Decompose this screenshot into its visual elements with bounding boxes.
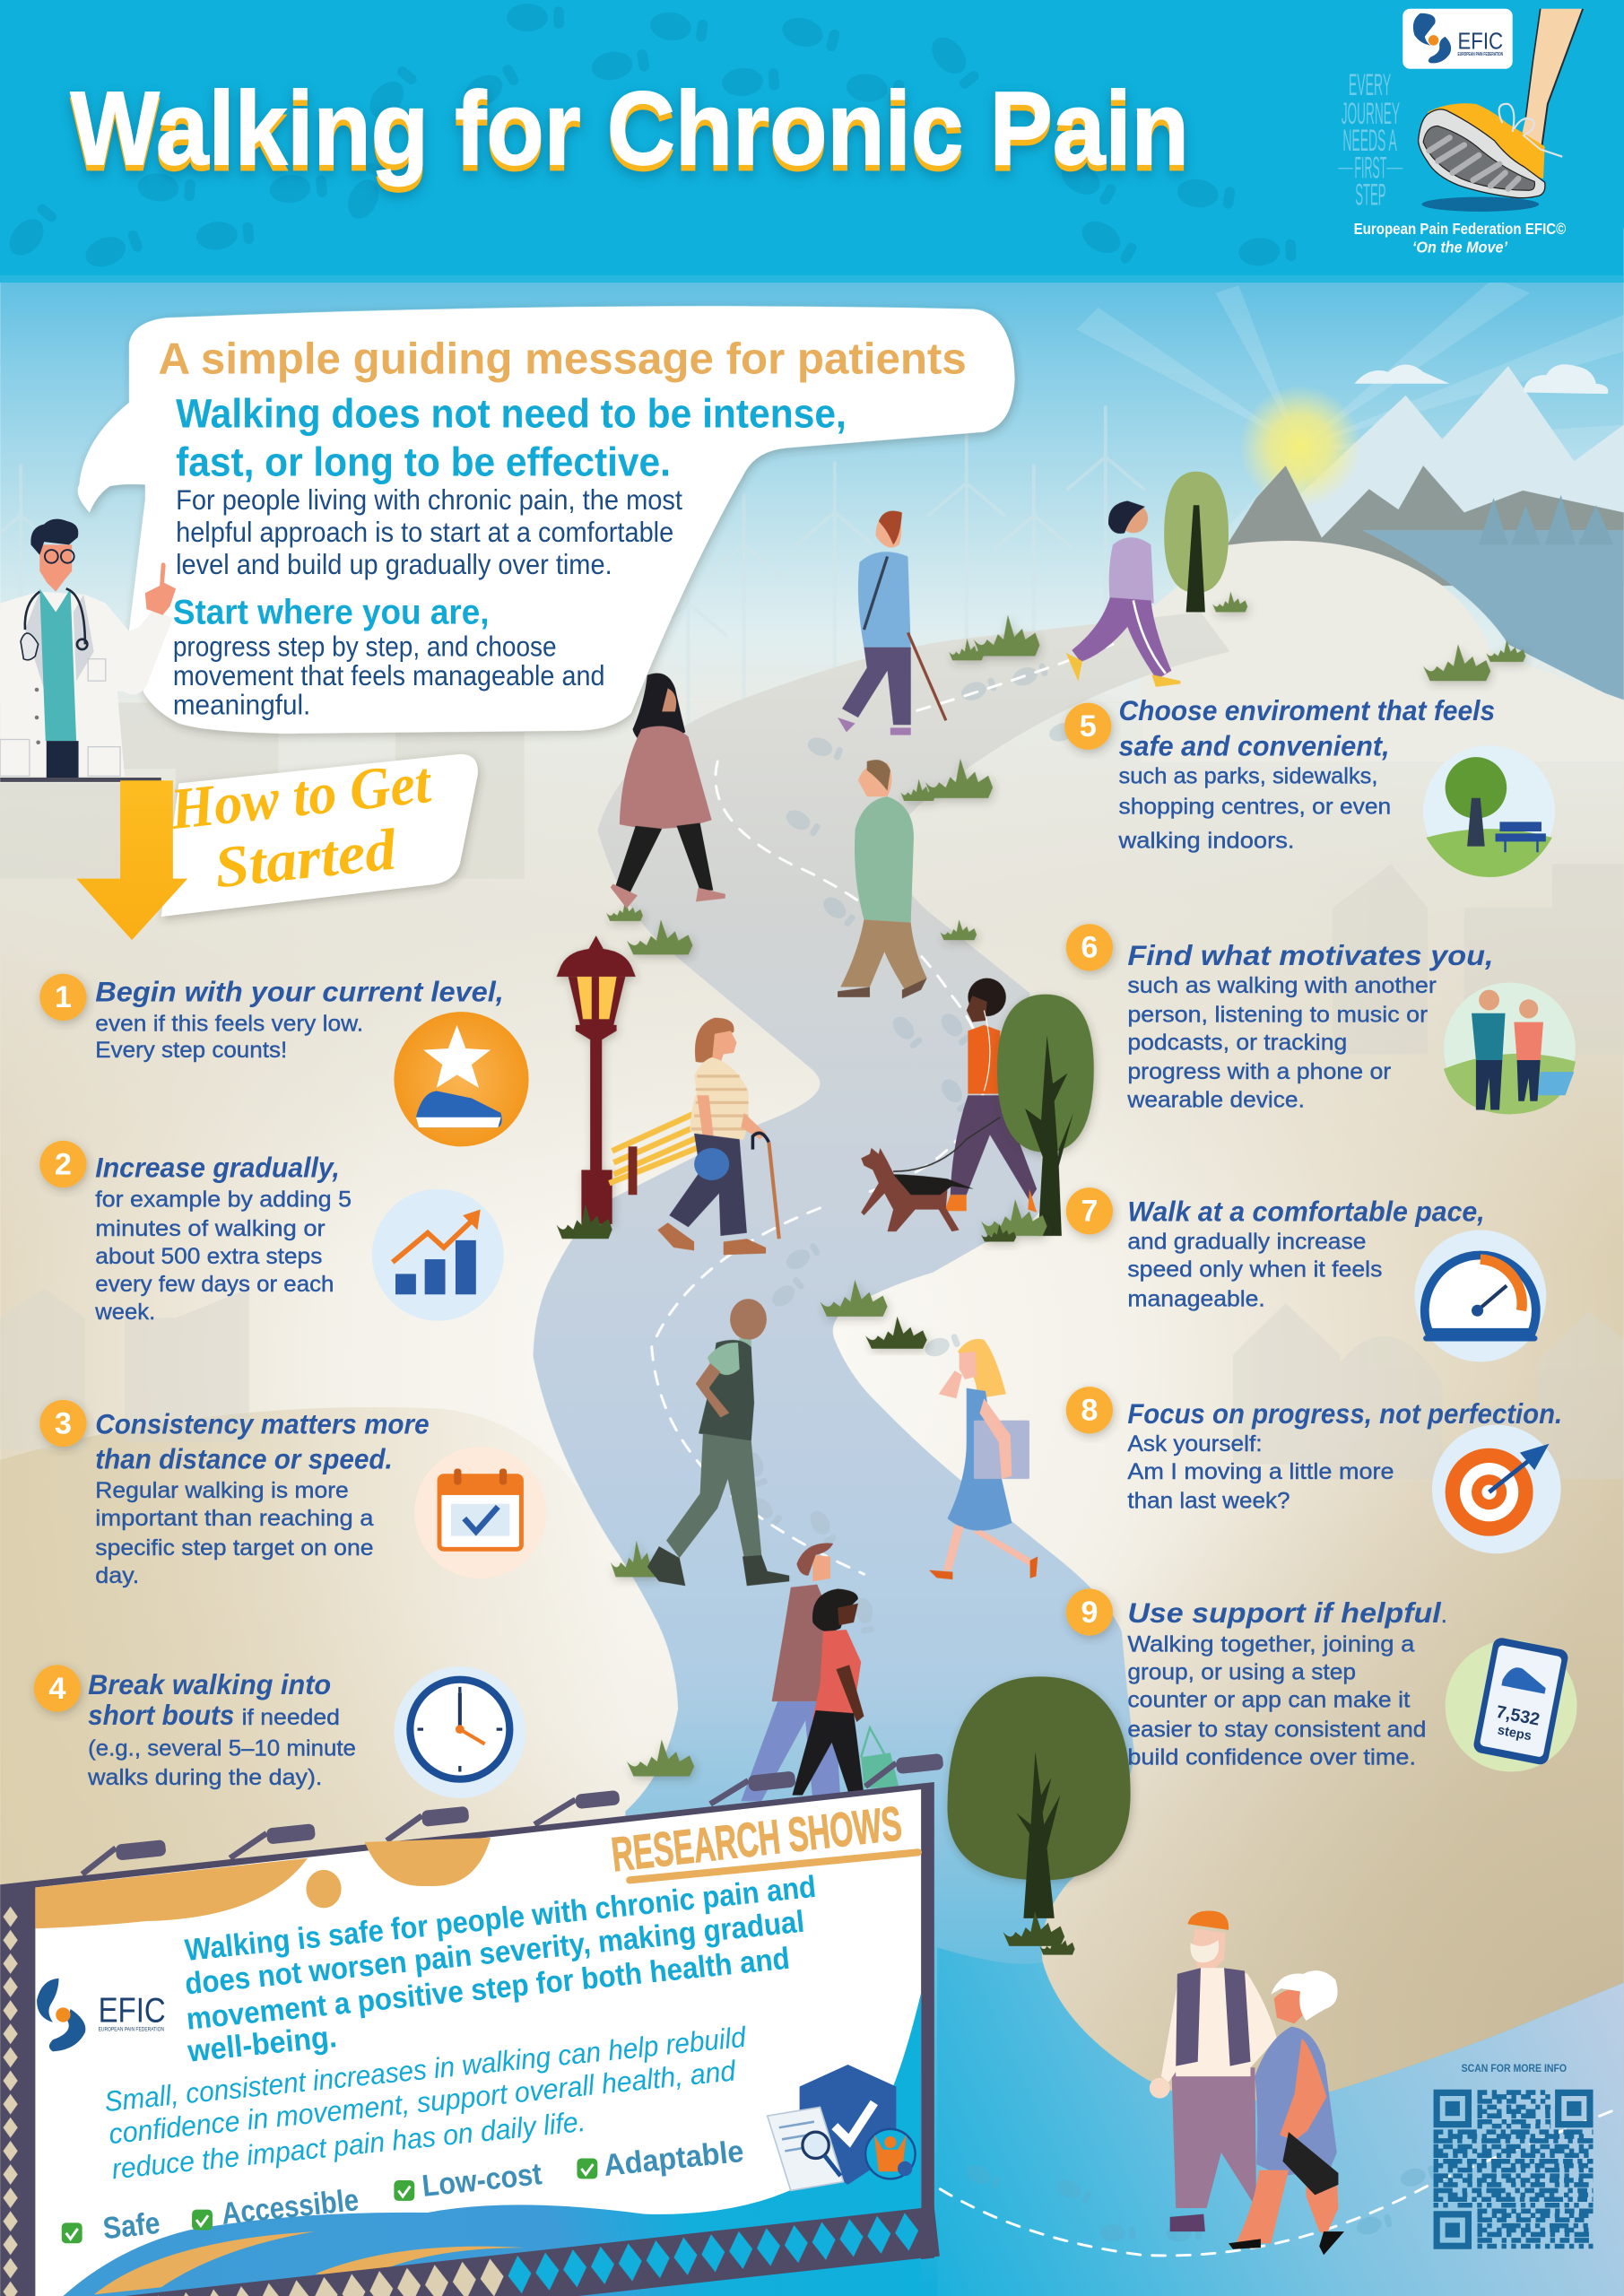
icon: leg and shoe bbox=[1419, 9, 1583, 212]
check list: Low-cost bbox=[421, 2157, 543, 2204]
federation caption: ‘On the Move’ bbox=[1412, 239, 1507, 257]
icon: shoe and star bbox=[394, 1012, 529, 1146]
explanation: For people living with chronic pain, the most bbox=[176, 484, 682, 516]
step 8 text bbox=[1127, 1397, 1562, 1514]
research shows heading: RESEARCH SHOWS bbox=[609, 1796, 905, 1882]
street lamp bbox=[557, 935, 636, 1224]
winding road bbox=[533, 612, 1624, 2296]
dog on leash bbox=[861, 1118, 1000, 1231]
step 4 text: walks during the day). bbox=[87, 1765, 322, 1790]
number badge bbox=[1066, 1588, 1113, 1636]
number badge: 4 bbox=[48, 1672, 65, 1706]
step 5 text bbox=[1117, 694, 1495, 853]
step 6 text: person, listening to music or bbox=[1127, 1003, 1428, 1028]
step 3 bbox=[39, 1400, 546, 1588]
person: woman in hijab bbox=[612, 674, 725, 905]
step 4 text: short bouts bbox=[88, 1699, 234, 1731]
research main statement bbox=[184, 1870, 818, 2069]
step 7 bbox=[1066, 1187, 1546, 1361]
progress text: meaningful. bbox=[173, 690, 310, 721]
step 9 text: easier to stay consistent and bbox=[1127, 1717, 1426, 1742]
step 2 text: minutes of walking or bbox=[95, 1216, 326, 1241]
research main statement: does not worsen pain severity, making gradual bbox=[184, 1905, 806, 2002]
sun bbox=[1238, 385, 1362, 509]
EFIC logo on board: EFIC bbox=[99, 1992, 166, 2031]
icon: speedometer bbox=[1414, 1230, 1546, 1361]
person: bald man in vest bbox=[647, 1299, 789, 1586]
step 5 bbox=[1064, 694, 1555, 877]
arrow: down to steps bbox=[76, 780, 187, 940]
icon: tree and bench bbox=[1423, 745, 1555, 877]
header band bbox=[0, 0, 1624, 283]
progress text: progress step by step, and choose bbox=[173, 631, 557, 662]
key message: Walking does not need to be intense, bbox=[176, 391, 847, 437]
step 4 text: (e.g., several 5–10 minute bbox=[88, 1736, 356, 1761]
key message: fast, or long to be effective. bbox=[176, 439, 671, 485]
step 9 text: counter or app can make it bbox=[1127, 1688, 1410, 1713]
number badge: 2 bbox=[55, 1147, 72, 1181]
step 9 bbox=[1066, 1588, 1577, 1772]
icon: two people walking bbox=[1444, 983, 1576, 1114]
green tree with walker bbox=[997, 995, 1094, 1236]
icon: shield, report and person bbox=[768, 2065, 916, 2190]
key message bbox=[176, 391, 847, 485]
dark grass at lamp bbox=[557, 1204, 612, 1239]
step 4 bbox=[34, 1665, 525, 1798]
footprints on the path bbox=[742, 661, 1086, 1635]
progress text bbox=[173, 631, 604, 721]
pale far road bbox=[1142, 541, 1624, 761]
step 6 bbox=[1066, 924, 1576, 1114]
step 5 text: walking indoors. bbox=[1117, 828, 1294, 853]
explanation: level and build up gradually over time. bbox=[176, 549, 612, 580]
lake bbox=[1362, 530, 1624, 703]
small top tree bbox=[1164, 472, 1229, 612]
research shows heading bbox=[609, 1796, 918, 1882]
banner heading: How to Get bbox=[167, 751, 435, 842]
number badge bbox=[34, 1665, 81, 1712]
step 6 text: such as walking with another bbox=[1127, 973, 1437, 998]
step 2 text: week. bbox=[94, 1300, 155, 1325]
number badge: 1 bbox=[55, 980, 72, 1014]
step 1 text bbox=[95, 976, 504, 1063]
person: older woman bbox=[1229, 1970, 1344, 2255]
step 7 text: Walk at a comfortable pace, bbox=[1127, 1196, 1485, 1228]
step 8 text: Ask yourself: bbox=[1127, 1431, 1263, 1457]
icon: phone step counter: 7,532 bbox=[1495, 1702, 1541, 1730]
step 2 bbox=[39, 1141, 504, 1325]
step 2 text: about 500 extra steps bbox=[95, 1244, 322, 1269]
number badge bbox=[1066, 1387, 1113, 1433]
icon: phone step counter: steps bbox=[1497, 1723, 1533, 1744]
number badge: 5 bbox=[1080, 709, 1097, 744]
step 5 text: safe and convenient, bbox=[1119, 729, 1390, 761]
EFIC logo badge: EFIC bbox=[1457, 28, 1503, 55]
research supporting text: reduce the impact pain has on daily life. bbox=[110, 2105, 587, 2185]
step 7 text bbox=[1127, 1196, 1485, 1311]
step 5 text: such as parks, sidewalks, bbox=[1119, 763, 1378, 788]
step 9 text bbox=[1127, 1596, 1447, 1770]
banner heading: Started bbox=[212, 817, 400, 900]
dashed walking route bbox=[652, 644, 1113, 1574]
left lattice bbox=[2, 1905, 19, 2296]
number badge bbox=[1066, 924, 1113, 970]
icon: calendar with check bbox=[414, 1447, 546, 1578]
research main statement: Walking is safe for people with chronic pain and bbox=[184, 1870, 818, 1968]
icon: phone step counter bbox=[1446, 1637, 1577, 1772]
step 3 text: than distance or speed. bbox=[95, 1443, 393, 1475]
slogan: STEP bbox=[1355, 178, 1386, 213]
step 9 text: . bbox=[1441, 1603, 1447, 1628]
lower lattice truss bbox=[49, 2206, 940, 2296]
slogan bbox=[1338, 68, 1403, 213]
scan caption: SCAN FOR MORE INFO bbox=[1462, 2062, 1567, 2074]
check list: Safe bbox=[101, 2206, 161, 2246]
step 3 text: day. bbox=[95, 1563, 139, 1588]
step 2 text bbox=[94, 1152, 352, 1325]
header footprints bbox=[3, 4, 1297, 272]
banner heading bbox=[167, 751, 435, 900]
near mountains bbox=[1227, 465, 1325, 544]
person: blonde woman on phone bbox=[932, 1339, 1037, 1578]
person: older man bbox=[1150, 1910, 1277, 2231]
white board bbox=[35, 1789, 921, 2296]
grass clumps bbox=[606, 592, 1525, 1776]
number badge: 9 bbox=[1081, 1596, 1098, 1630]
EFIC logo on board bbox=[37, 1979, 166, 2051]
number badge: 3 bbox=[55, 1406, 72, 1440]
federation caption bbox=[1354, 220, 1567, 257]
EFIC logo badge bbox=[1403, 9, 1513, 69]
step 8 text: Am I moving a little more bbox=[1127, 1459, 1394, 1484]
beige wave accents bbox=[94, 2231, 525, 2294]
step 2 text: Increase gradually, bbox=[95, 1152, 340, 1184]
research supporting text bbox=[103, 2021, 748, 2185]
speech bubble: guiding message bbox=[78, 306, 1015, 734]
number badge bbox=[39, 1400, 87, 1447]
step 7 text: and gradually increase bbox=[1127, 1230, 1366, 1255]
research main statement: movement a positive step for both health and bbox=[185, 1942, 791, 2037]
frame bbox=[0, 1782, 934, 2296]
header band: JOURNEY bbox=[1342, 97, 1400, 131]
QR code block bbox=[1434, 2062, 1594, 2249]
person: doctor pointing bbox=[0, 519, 176, 782]
step 8 bbox=[1066, 1387, 1562, 1553]
EFIC logo badge: EUROPEAN PAIN FEDERATION bbox=[1457, 52, 1503, 57]
forest bbox=[1479, 495, 1613, 544]
step 7 text: manageable. bbox=[1127, 1286, 1265, 1311]
person: walker in orange with dog bbox=[944, 978, 1037, 1213]
research supporting text: Small, consistent increases in walking can help rebuild bbox=[103, 2021, 748, 2118]
step 4 text: if needed bbox=[242, 1705, 340, 1730]
icon: target and arrow bbox=[1432, 1425, 1561, 1553]
start where you are: Start where you are, bbox=[173, 594, 489, 632]
posts bbox=[689, 2270, 791, 2296]
step 9 text: Walking together, joining a bbox=[1127, 1632, 1415, 1657]
grass at tree base bbox=[981, 1199, 1047, 1241]
bubble heading: A simple guiding message for patients bbox=[159, 335, 967, 383]
step 5 text: shopping centres, or even bbox=[1119, 795, 1391, 820]
person: couple walking together bbox=[741, 1543, 899, 1801]
EFIC logo on board: EUROPEAN PAIN FEDERATION bbox=[99, 2026, 164, 2032]
icon: clock bbox=[394, 1666, 525, 1798]
clouds bbox=[1354, 364, 1608, 394]
person: man in green sweater bbox=[838, 760, 927, 998]
step 9 text: Use support if helpful bbox=[1127, 1596, 1442, 1629]
far snowy mountains bbox=[1289, 366, 1624, 556]
check list: Accessible bbox=[220, 2183, 360, 2231]
research main statement: well-being. bbox=[186, 2020, 338, 2069]
header band: NEEDS A bbox=[1342, 124, 1397, 158]
step 1 text: Begin with your current level, bbox=[95, 976, 504, 1008]
step 9 text: group, or using a step bbox=[1127, 1660, 1356, 1685]
check list bbox=[62, 2135, 745, 2246]
step 1 text: even if this feels very low. bbox=[95, 1011, 363, 1036]
step 6 text: podcasts, or tracking bbox=[1127, 1031, 1347, 1056]
step 7 text: speed only when it feels bbox=[1127, 1257, 1382, 1283]
number badge: 7 bbox=[1081, 1195, 1098, 1229]
city silhouettes bbox=[0, 703, 1624, 1479]
step 6 text: Find what motivates you, bbox=[1127, 939, 1493, 971]
step 6 text bbox=[1126, 939, 1493, 1112]
step 3 text: Consistency matters more bbox=[95, 1407, 430, 1439]
step 3 text: specific step target on one bbox=[95, 1535, 374, 1561]
number badge bbox=[1064, 703, 1111, 750]
step 3 text: important than reaching a bbox=[95, 1506, 375, 1531]
check list: Adaptable bbox=[602, 2135, 745, 2183]
step 8 text: Focus on progress, not perfection. bbox=[1127, 1397, 1562, 1430]
lamp arms bbox=[83, 1753, 944, 1874]
person: woman with cane and bag bbox=[657, 1018, 779, 1255]
explanation bbox=[176, 484, 682, 580]
QR code bbox=[1434, 2090, 1594, 2249]
number badge: 8 bbox=[1081, 1394, 1098, 1428]
person: woman jogging in purple bbox=[1069, 500, 1180, 685]
slogan: FIRST bbox=[1354, 151, 1386, 185]
progress text: movement that feels manageable and bbox=[173, 660, 604, 691]
billboard: research shows bbox=[0, 1753, 944, 2296]
federation caption: European Pain Federation EFIC© bbox=[1354, 220, 1567, 238]
step 4 text bbox=[87, 1668, 356, 1790]
step 1 text: Every step counts! bbox=[95, 1038, 287, 1063]
yellow park bench bbox=[609, 1114, 697, 1195]
title: Walking for Chronic Pain bbox=[71, 70, 1189, 187]
step 2 text: for example by adding 5 bbox=[95, 1187, 352, 1212]
step 8 text: than last week? bbox=[1127, 1489, 1290, 1514]
sun rays bbox=[1076, 278, 1624, 703]
step 6 text: wearable device. bbox=[1126, 1087, 1305, 1112]
dark grass near speed item bbox=[865, 1317, 927, 1349]
person: man with cane bbox=[838, 511, 946, 735]
large lower tree bbox=[948, 1676, 1131, 1955]
research supporting text: confidence in movement, support overall health, and bbox=[108, 2054, 738, 2150]
step 9 text: build confidence over time. bbox=[1127, 1744, 1416, 1770]
step 1 bbox=[39, 974, 529, 1146]
blue wave bbox=[35, 1993, 921, 2296]
step 3 text bbox=[95, 1407, 430, 1588]
icon: rising bar chart bbox=[372, 1189, 504, 1321]
slogan: EVERY bbox=[1349, 68, 1391, 102]
number badge: 6 bbox=[1081, 931, 1098, 965]
number badge bbox=[39, 1141, 87, 1187]
wind turbines bbox=[0, 407, 1143, 764]
how to get started banner bbox=[161, 751, 478, 917]
step 6 text: progress with a phone or bbox=[1127, 1059, 1391, 1084]
step 4 text: Break walking into bbox=[88, 1668, 331, 1700]
number badge bbox=[39, 974, 87, 1021]
lower right blue ground bbox=[937, 1947, 1624, 2296]
step 3 text: Regular walking is more bbox=[95, 1478, 349, 1503]
explanation: helpful approach is to start at a comfortable bbox=[176, 517, 673, 548]
step 2 text: every few days or each bbox=[95, 1272, 334, 1297]
number badge bbox=[1066, 1187, 1113, 1234]
orange top shapes bbox=[35, 1838, 491, 1928]
step 5 text: Choose enviroment that feels bbox=[1119, 694, 1495, 726]
